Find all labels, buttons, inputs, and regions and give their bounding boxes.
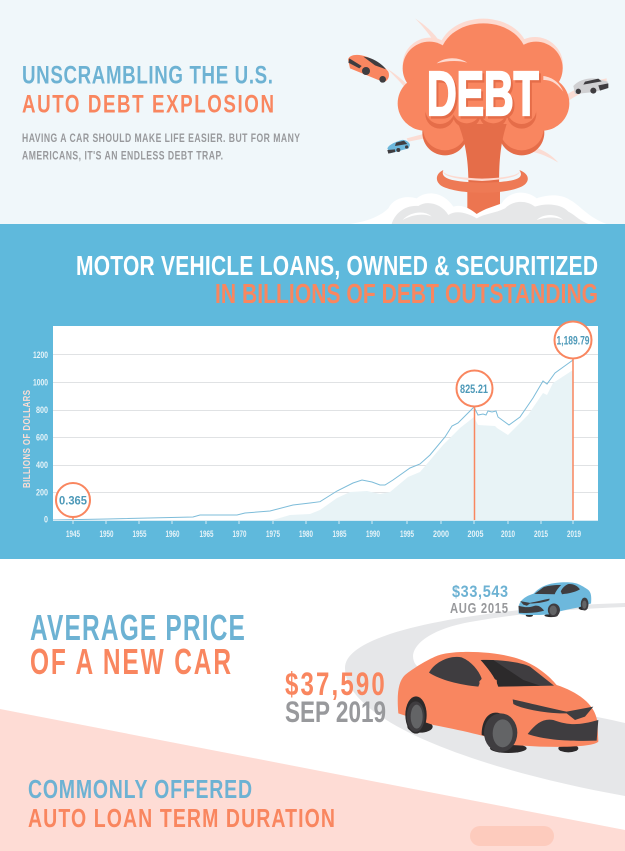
- price label: 2019: $37,590: [285, 666, 385, 702]
- heading: average price: OF A NEW CAR: [30, 641, 231, 682]
- y axis labels: 600: [36, 432, 48, 442]
- y axis labels: 800: [36, 405, 48, 415]
- y axis labels: 1200: [33, 350, 48, 360]
- intro text: HAVING A CAR SHOULD MAKE LIFE EASIER. BUT FOR MANY: [22, 133, 300, 145]
- x axis labels: 1975: [266, 529, 280, 539]
- x axis labels: 2000: [433, 529, 449, 539]
- y axis labels: 1000: [33, 378, 48, 388]
- x axis labels: 1950: [100, 529, 114, 539]
- y axis labels: [33, 350, 48, 524]
- title: [22, 61, 274, 118]
- pill: [470, 826, 554, 846]
- callout: 2005 value: [456, 370, 492, 406]
- y axis labels: 400: [36, 460, 48, 470]
- price label: 2019: SEP 2019: [285, 695, 386, 729]
- panel: lower pink background: [0, 709, 625, 851]
- heading: loan term duration: AUTO LOAN TERM DURATION: [28, 803, 335, 833]
- y axis labels: 200: [36, 488, 48, 498]
- icon: debt explosion mushroom cloud: [348, 18, 608, 224]
- title: UNSCRAMBLING THE U.S.: [22, 61, 273, 89]
- heading: loan term duration: [28, 774, 335, 833]
- x axis labels: 2019: [567, 529, 581, 539]
- intro text: AMERICANS, IT'S AN ENDLESS DEBT TRAP.: [22, 150, 223, 163]
- icon: blue car: [518, 582, 591, 617]
- heading: loans chart: MOTOR VEHICLE LOANS, OWNED & SECURITIZED: [76, 251, 598, 282]
- chart: motor vehicle loans: [53, 326, 598, 524]
- x axis labels: 2010: [501, 529, 515, 539]
- callout: 2019 value: 1,189.79: [556, 334, 590, 348]
- text: debt: DEBT: [427, 60, 539, 129]
- price label: 2015: $33,543: [452, 583, 508, 601]
- icon: road: [345, 603, 625, 796]
- price label: 2019: [285, 666, 386, 729]
- y axis title: BILLIONS OF DOLLARS: [21, 390, 32, 488]
- x axis labels: 1980: [299, 529, 313, 539]
- price label: 2015: [450, 583, 508, 616]
- heading: loans chart: [76, 251, 598, 310]
- heading: average price: AVERAGE PRICE: [30, 607, 245, 648]
- x axis labels: 1970: [232, 529, 246, 539]
- icon: blue flying car: [387, 140, 410, 154]
- x axis labels: 1990: [366, 529, 380, 539]
- title: AUTO DEBT EXPLOSION: [22, 90, 274, 118]
- icon: orange car: [398, 652, 598, 753]
- price label: 2015: AUG 2015: [450, 599, 508, 616]
- text: debt shadow: DEBT: [429, 63, 541, 132]
- panel: header background: [0, 0, 625, 224]
- icon: grey flying car: [573, 78, 608, 94]
- panel: loans section background: [0, 224, 625, 559]
- chart line: [53, 360, 573, 520]
- chart area: [273, 370, 573, 520]
- y axis labels: 0: [44, 514, 48, 524]
- x axis labels: 1960: [166, 529, 180, 539]
- x axis labels: 2015: [534, 529, 548, 539]
- callout: 2019 value: [554, 322, 592, 358]
- intro text: [22, 133, 300, 163]
- callout: 1945 value: 0.365: [59, 494, 87, 508]
- x axis labels: 1995: [400, 529, 414, 539]
- callout: 1945 value: [56, 483, 90, 517]
- x axis labels: [66, 529, 581, 539]
- callout: 2005 value: 825.21: [460, 382, 488, 396]
- heading: loan term duration: COMMONLY OFFERED: [28, 774, 252, 804]
- x axis labels: 1945: [66, 529, 80, 539]
- x axis labels: 1965: [200, 529, 214, 539]
- x axis labels: 2005: [468, 529, 484, 539]
- heading: loans chart: IN BILLIONS OF DEBT OUTSTANDING: [215, 279, 598, 310]
- x axis labels: 1985: [332, 529, 346, 539]
- heading: average price: [30, 607, 245, 682]
- icon: smoke cloud: [350, 193, 607, 224]
- icon: orange flying car: [348, 55, 389, 83]
- x axis labels: 1955: [132, 529, 146, 539]
